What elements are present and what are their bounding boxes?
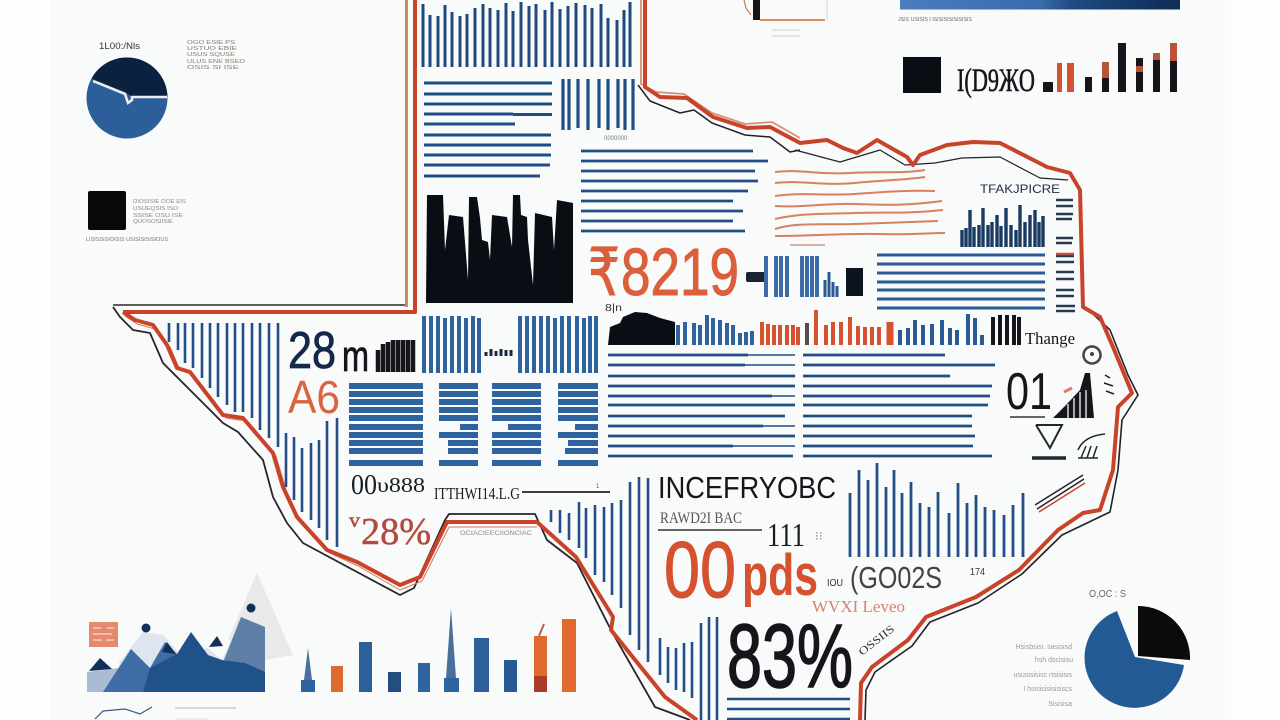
bottom right pie chart bbox=[1085, 589, 1190, 708]
vertical bars block bbox=[563, 79, 633, 142]
pie title: O,OC : S bbox=[1089, 589, 1126, 600]
small label: 8|n bbox=[605, 303, 622, 314]
pie side note bbox=[187, 40, 246, 71]
lines under percentage bbox=[727, 699, 850, 719]
black box with note bbox=[86, 191, 186, 243]
grey code label: IOU bbox=[827, 578, 843, 589]
pie side note: USUS SQUSE bbox=[187, 52, 235, 58]
serif label row: ITTHWI14.L.G bbox=[434, 484, 520, 503]
small dark bar chart with label bbox=[962, 182, 1060, 247]
horizontal bars block B bbox=[581, 151, 768, 231]
black box with note: LISISSISIOISIS USISISISISIOUS bbox=[86, 237, 169, 243]
small blue bars, pill and black box bbox=[746, 256, 863, 297]
orange number A6: A6 bbox=[288, 371, 340, 423]
big orange number: ₹ bbox=[588, 235, 620, 309]
number 01 with tower icon bbox=[1006, 363, 1114, 421]
top right bar chart bbox=[1043, 43, 1177, 92]
black skyline chart bbox=[426, 195, 573, 303]
long horizontal bars, right column bbox=[803, 355, 995, 456]
pie side note: OSIS SI ISE bbox=[187, 65, 240, 71]
small caption under border: OCIACIEECIIONCIAC bbox=[460, 531, 533, 537]
subheading and rule: RAWD2I BAC bbox=[660, 510, 742, 527]
bottom bar chart bbox=[301, 608, 576, 692]
red percentage: 28% bbox=[361, 511, 431, 553]
serif label row: 00 bbox=[351, 470, 377, 501]
panhandle-side vertical bars bbox=[169, 323, 337, 547]
big percentage 83%: 83% bbox=[727, 607, 853, 707]
top small chart fragment bbox=[744, 0, 827, 36]
small dark bar chart with label: TFAKJPICRE bbox=[980, 182, 1060, 196]
south vertical bars bbox=[551, 477, 717, 720]
top blue banner: JSIS USISIS I ISISISISISISISIS bbox=[898, 17, 973, 23]
serif label row bbox=[351, 470, 610, 503]
small black label: Thange bbox=[1025, 329, 1075, 348]
icon: fan lines bbox=[1078, 434, 1105, 458]
pie legend: Hsisbsisi. sasisisd bbox=[1016, 644, 1072, 651]
black box with note: USUEQSIS ISO bbox=[133, 206, 179, 212]
horizontal bars block C bbox=[877, 255, 1045, 308]
horizontal bars block A bbox=[424, 83, 552, 176]
pie legend: ususisisisc rtsisisis bbox=[1014, 672, 1072, 679]
pie label: 1L00:/Nls bbox=[99, 41, 141, 51]
pie chart top left bbox=[86, 41, 168, 138]
big orange figure: pds bbox=[742, 543, 818, 608]
icon: orange square bbox=[89, 622, 118, 647]
serif label row: υ888 bbox=[377, 473, 425, 497]
subheading and rule bbox=[658, 510, 823, 554]
diagonal small text: OSSIIS bbox=[856, 623, 897, 658]
small caption: 0000000 bbox=[604, 136, 628, 142]
top vertical bar chart bbox=[423, 2, 630, 67]
black box with note: SSISE OSU ISE bbox=[133, 213, 183, 219]
headline text: INCEFRYOBC bbox=[658, 470, 836, 505]
top right code: I(D9ЖO bbox=[957, 63, 1035, 99]
big orange figure: 00 bbox=[664, 525, 736, 614]
subheading and rule: 111 bbox=[767, 517, 805, 554]
pie legend bbox=[1014, 644, 1073, 708]
black box with note: QUOSOSIISIE bbox=[133, 219, 173, 225]
red percentage: v bbox=[349, 510, 360, 532]
pie side note: USTUO EBIE bbox=[187, 46, 237, 52]
number 01 with tower icon: 01 bbox=[1006, 363, 1052, 421]
icon: triangle stand bbox=[1032, 425, 1066, 458]
headline number 28m: 28 bbox=[288, 322, 336, 380]
pie legend: I hsisisisisisiscs bbox=[1023, 686, 1072, 693]
subheading and rule: ⁝⁝ bbox=[815, 529, 823, 543]
top right black box bbox=[903, 57, 941, 93]
grey code label: 174 bbox=[970, 567, 985, 578]
black box with note: DIOSISIE OOE EIS bbox=[133, 199, 186, 205]
icon: round gauge bbox=[1084, 346, 1100, 364]
east vertical bar chart bbox=[850, 463, 1085, 557]
west blue bars bbox=[424, 316, 596, 373]
stack of short lines bbox=[1056, 200, 1075, 311]
long horizontal bars, left column bbox=[608, 355, 795, 456]
pie side note: ULUS ENE BSEO bbox=[187, 59, 246, 65]
pie side note: OGO ESIE PS bbox=[187, 40, 235, 46]
blue stacked blocks bbox=[349, 386, 598, 463]
pie legend: Sisisisa bbox=[1048, 701, 1072, 708]
mountain area chart bbox=[87, 573, 293, 692]
big orange figure bbox=[664, 525, 818, 614]
big orange number: 8219 bbox=[621, 235, 739, 310]
grey code label: (GO02S bbox=[850, 560, 942, 595]
big orange number bbox=[588, 235, 739, 310]
headline number 28m: m bbox=[342, 332, 369, 381]
serif label row: 1 bbox=[596, 484, 600, 490]
pink label: WVXI Leveo bbox=[812, 597, 905, 616]
bottom fragment bbox=[95, 707, 236, 719]
wavy orange lines bbox=[775, 170, 945, 245]
pie legend: hsh dscisisu bbox=[1035, 657, 1073, 664]
top blue banner bbox=[898, 0, 1180, 23]
headline number 28m bbox=[288, 322, 413, 381]
centre bar row bbox=[608, 310, 1019, 345]
